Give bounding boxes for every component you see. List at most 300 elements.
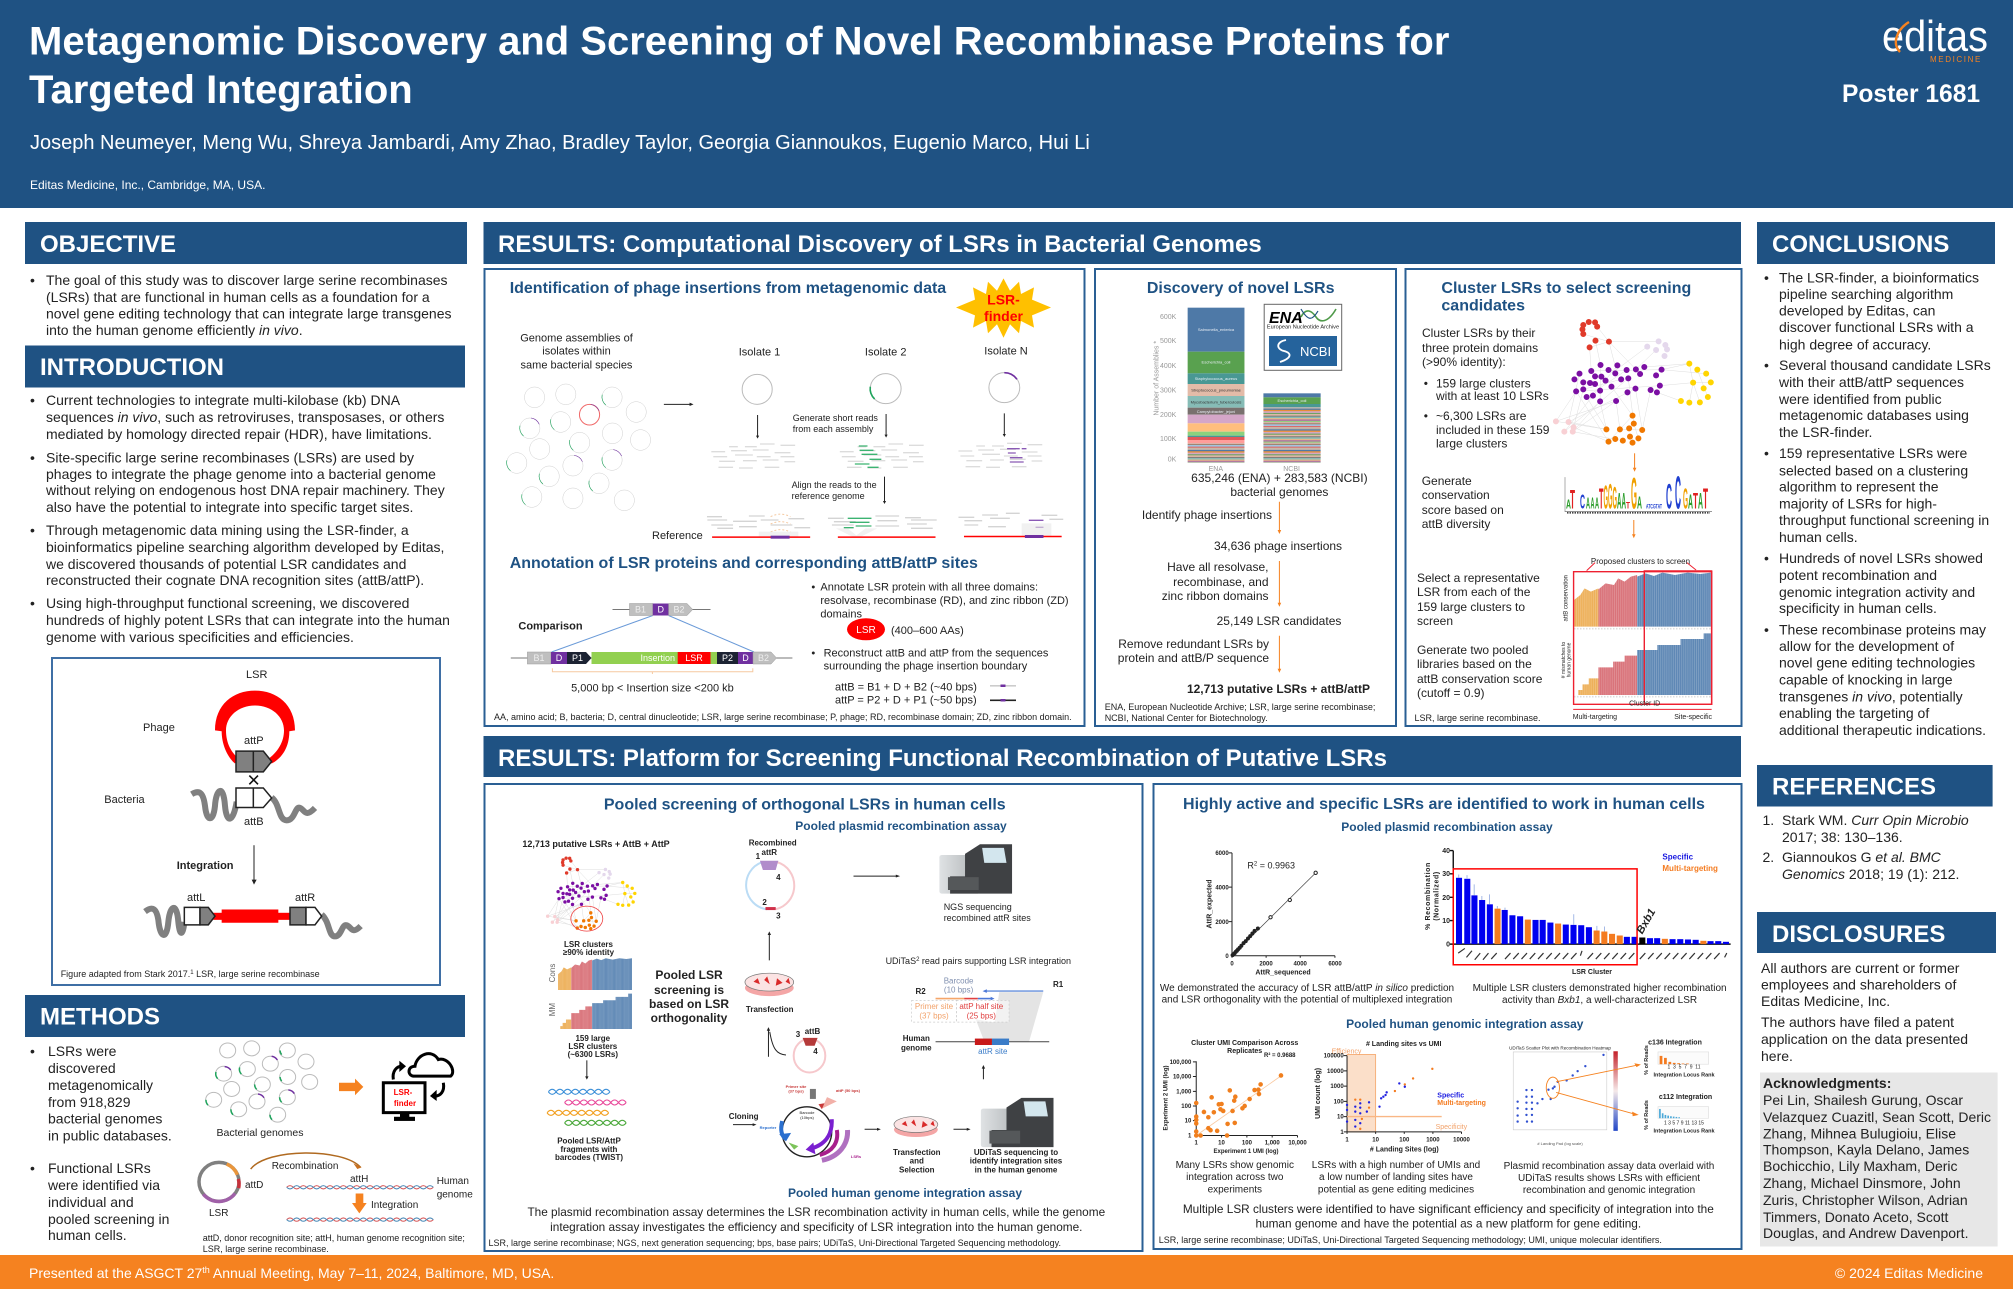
chart: landing sites vs UMI: UMI count (log) bbox=[1315, 1068, 1322, 1119]
labels: read pair diagram: attR site bbox=[978, 1047, 1008, 1056]
labels: read pair diagram: genome bbox=[901, 1044, 932, 1052]
chart: attB sequence logo: G bbox=[1604, 478, 1608, 516]
conclusions bullets: throughput functional screening in bbox=[1779, 512, 1989, 528]
icon: recombined plasmid bbox=[746, 861, 794, 909]
arrows: library workflow bbox=[865, 1128, 971, 1131]
plasmid labels: 4 bbox=[776, 873, 781, 882]
chart: heatmap scatter with integration insets: 1 3 5 7 9 11 13 15 bbox=[1664, 1120, 1704, 1126]
introduction bullets: • bbox=[30, 392, 35, 408]
chart: landing sites vs UMI: 10000 bbox=[1327, 1069, 1344, 1075]
panel summary: integration assay investigates the efficiency and specificity of LSR integration into the human genome. bbox=[550, 1220, 1082, 1234]
short reads bbox=[707, 443, 1063, 528]
plasmid labels: Primer site bbox=[786, 1084, 807, 1089]
chart: UMI replicates scatter: 1,000 bbox=[1176, 1090, 1192, 1096]
chart: attB sequence logo: T bbox=[1599, 482, 1604, 515]
chart: stacked assemblies: 600K bbox=[1160, 314, 1177, 321]
chart: landing sites vs UMI bbox=[1315, 1041, 1486, 1153]
footnote: LSR, large serine recombinase; NGS, next generation sequencing; bps, base pairs; UDiTaS, Uni-Directional Targeted Sequencing methodology. bbox=[488, 1238, 1061, 1248]
plasmid labels bbox=[729, 838, 862, 1159]
panel: phage insertions and annotation bbox=[484, 269, 1084, 726]
arrows: filter flow bbox=[1278, 502, 1281, 673]
chart: heatmap scatter with integration insets bbox=[1509, 1040, 1715, 1146]
plasmid labels: Reporter bbox=[760, 1125, 777, 1130]
heading: cluster LSRs: Cluster LSRs to select screening bbox=[1441, 280, 1691, 297]
icon: editas logo: MEDICINE bbox=[1930, 55, 1982, 64]
subheading: genomic integration: Pooled human genomic integration assay bbox=[1346, 1017, 1584, 1031]
conclusions bullets: selected based on a clustering bbox=[1779, 462, 1968, 478]
annotation bullets: • bbox=[811, 647, 815, 659]
callout: LSR-finder star bbox=[956, 278, 1051, 338]
text: clustering: • bbox=[1424, 376, 1428, 390]
annotation bullets: resolvase, recombinase (RD), and zinc ribbon (ZD) bbox=[820, 595, 1069, 607]
plasmid labels: 2 bbox=[762, 898, 767, 907]
footnote: LSR, large serine recombinase; UDiTaS, Uni-Directional Targeted Sequencing methodology; UMI, unique molecular identifiers. bbox=[1159, 1235, 1662, 1245]
chart: stacked assemblies: NCBI bbox=[1283, 466, 1300, 473]
chart: proposed clusters: attB conservation bbox=[1564, 575, 1570, 621]
disclosures text: Editas Medicine, Inc. bbox=[1761, 993, 1890, 1009]
diagram: isolates and read alignment bbox=[507, 373, 1063, 539]
chart: attB sequence logo: A bbox=[1590, 496, 1595, 513]
caption: replicates: Many LSRs show genomic bbox=[1176, 1160, 1294, 1171]
objective text: novel gene editing technology that can integrate large transgenes bbox=[46, 306, 452, 322]
flow: filter steps: zinc ribbon domains bbox=[1162, 589, 1268, 603]
reference lines bbox=[712, 535, 1062, 539]
label: read alignment: reference genome bbox=[792, 491, 865, 501]
chart: stacked assemblies: Salmonella_enterica bbox=[1198, 327, 1235, 332]
acknowledgments box: Thompson, Kayla Delano, James bbox=[1763, 1142, 1969, 1158]
heading: references bbox=[1757, 765, 1993, 806]
icon: sequencer bbox=[939, 844, 1012, 894]
chart: landing sites vs UMI: 10 bbox=[1372, 1138, 1380, 1144]
heading: pooled screening: Pooled screening of orthogonal LSRs in human cells bbox=[604, 796, 1006, 814]
acknowledgments box: Pei Lin, Shailesh Gurung, Oscar bbox=[1763, 1092, 1963, 1108]
panel summary: The plasmid recombination assay determines the LSR recombination activity in human cells, while the genome bbox=[527, 1205, 1106, 1219]
flow: filter steps: 25,149 LSR candidates bbox=[1217, 614, 1341, 628]
chart: LSR cluster network bbox=[1556, 322, 1711, 443]
panel: active and specific LSRs bbox=[1154, 784, 1742, 1249]
label: fragments: Pooled LSR/AttP bbox=[557, 1137, 621, 1146]
chart: attB sequence logo: A bbox=[1688, 491, 1693, 514]
diagram: insertion comparison: Insertion bbox=[640, 653, 675, 663]
footer bar bbox=[0, 1255, 2013, 1289]
chart: attB sequence logo: G bbox=[1683, 482, 1688, 515]
conclusions bullets: in vivo, potentially bbox=[1852, 689, 1963, 705]
introduction bullets: • bbox=[30, 522, 35, 538]
diagram labels: LSR bbox=[246, 669, 267, 681]
conclusions bullets: genomic integration activity and bbox=[1779, 584, 1975, 600]
methods bullets: Functional LSRs bbox=[48, 1160, 151, 1176]
chart: landing sites vs UMI: # Landing Sites (log) bbox=[1370, 1146, 1439, 1153]
chart: landing sites vs UMI: 1000 bbox=[1426, 1138, 1440, 1144]
chart: attB sequence logo: T bbox=[1626, 500, 1631, 510]
label: read generation: Generate short reads bbox=[793, 413, 878, 423]
chart: attR scatter bbox=[1206, 851, 1342, 976]
chart: stacked assemblies: Streptococcus_pneumoniae bbox=[1191, 388, 1242, 392]
annotation bullets: Reconstruct attB and attP from the sequences bbox=[824, 647, 1049, 659]
plasmid labels: attR bbox=[762, 848, 777, 857]
chart: proposed clusters: Cluster ID bbox=[1629, 700, 1660, 708]
chart: recombination bars: 10 bbox=[1442, 918, 1450, 925]
chart: stacked assemblies bbox=[1154, 308, 1321, 473]
callout: pooled LSR orthogonality: screening is bbox=[654, 983, 724, 997]
chart: landing sites vs UMI: 100 bbox=[1399, 1138, 1410, 1144]
label: genome assemblies: same bacterial species bbox=[521, 360, 633, 372]
label: genome assemblies: Genome assemblies of bbox=[520, 332, 634, 344]
text: clustering: Cluster LSRs by their bbox=[1422, 326, 1535, 340]
chart: attB sequence logo: G bbox=[1612, 481, 1617, 516]
text: select representative: screen bbox=[1417, 614, 1453, 628]
annotation bullets: surrounding the phage insertion boundary bbox=[824, 660, 1028, 672]
chart: UMI replicates scatter: 100 bbox=[1242, 1141, 1253, 1147]
arrow: UDiTaS up bbox=[982, 1065, 985, 1079]
chart: mini cluster bars bbox=[548, 958, 632, 1029]
introduction bullets bbox=[30, 392, 450, 645]
chart: recombination bars: Multi-targeting bbox=[1662, 864, 1718, 873]
label: UDiTaS read pairs: read pairs supporting LSR integration bbox=[919, 956, 1071, 966]
objective text: The goal of this study was to discover large serine recombinases bbox=[46, 272, 448, 288]
acknowledgments box: Zhang, Mihnea Bulugioiu, Elise bbox=[1763, 1126, 1956, 1142]
chart: landing sites vs UMI: 100000 bbox=[1324, 1054, 1344, 1060]
isolate labels: Isolate 2 bbox=[865, 346, 906, 358]
flow: filter steps: Remove redundant LSRs by bbox=[1118, 637, 1269, 651]
label: comparison: Comparison bbox=[518, 620, 583, 632]
diagram labels: attH bbox=[350, 1174, 368, 1185]
diagram labels: attL bbox=[187, 892, 205, 904]
label: LSR clusters: LSR clusters bbox=[564, 940, 614, 949]
acknowledgments box: Zuris, Christopher Wilson, Adrian bbox=[1763, 1192, 1968, 1208]
label: UDiTaS sequencing: identify integration sites bbox=[970, 1157, 1063, 1166]
footer: meeting: Annual Meeting, May 7–11, 2024, Baltimore, MD, USA. bbox=[210, 1265, 554, 1281]
chart: attB sequence logo: A bbox=[1698, 489, 1703, 514]
conclusions bullets: the LSR-finder. bbox=[1779, 424, 1872, 440]
chart: attB sequence logo: A bbox=[1566, 497, 1571, 511]
figure note: 1 bbox=[190, 970, 194, 976]
label: large clusters: (~6300 LSRs) bbox=[568, 1050, 618, 1059]
heading: conclusions bbox=[1757, 222, 1995, 264]
text: clustering: included in these 159 bbox=[1436, 423, 1550, 437]
chart: heatmap scatter with integration insets: # Landing Pad (log scale) bbox=[1537, 1141, 1583, 1146]
footnote: AA, amino acid; B, bacteria; D, central dinucleotide; LSR, large serine recombinase; P, phage; RD, recombinase domain; ZD, zinc ribbon domain. bbox=[494, 712, 1072, 722]
conclusions bullets: These recombinase proteins may bbox=[1779, 622, 1986, 638]
diagram labels: Integration bbox=[371, 1200, 418, 1211]
diagram labels: attB bbox=[244, 816, 264, 828]
introduction bullets: also have the potential to integrate into specific target sites. bbox=[46, 499, 413, 515]
arrow: cloning bbox=[733, 1123, 756, 1126]
conclusions bullets: metagenomic databases using bbox=[1779, 407, 1969, 423]
caption: landing sites: LSRs with a high number of UMIs and bbox=[1312, 1160, 1480, 1171]
chart: recombination bars: 30 bbox=[1442, 871, 1450, 878]
chart: recombination bars bbox=[1425, 848, 1731, 976]
conclusions bullets: discover functional LSRs with a bbox=[1779, 319, 1974, 335]
text: pooled libraries: (cutoff = 0.9) bbox=[1417, 686, 1484, 700]
chart: attR scatter: 0 bbox=[1230, 962, 1234, 968]
integration label: Integration bbox=[177, 860, 234, 872]
label: read alignment: Align the reads to the bbox=[792, 480, 877, 490]
chart: proposed clusters bbox=[1561, 557, 1712, 721]
chart: UMI replicates scatter: 1 bbox=[1195, 1141, 1199, 1147]
chart: landing sites vs UMI: Efficiency bbox=[1332, 1048, 1362, 1056]
methods bullets bbox=[30, 1043, 172, 1243]
introduction bullets: reconstructed their cognate DNA recognition sites (attB/attP). bbox=[46, 572, 424, 588]
poster title: Metagenomic Discovery and Screening of Novel Recombinase Proteins for bbox=[29, 20, 1449, 64]
diagram: insertion comparison: B1 bbox=[635, 605, 646, 615]
icon: ENA and NCBI logos: ENA bbox=[1269, 310, 1303, 327]
chart: stacked assemblies: Staphylococcus_aureus bbox=[1195, 376, 1237, 381]
chart: heatmap scatter with integration insets: 1 3 5 7 9 11 bbox=[1668, 1064, 1701, 1070]
references list: et al. BMC bbox=[1875, 849, 1942, 865]
chart: recombination bars: 20 bbox=[1442, 895, 1450, 902]
diagram: insertion comparison bbox=[511, 604, 792, 674]
objective text: in vivo. bbox=[259, 322, 303, 338]
introduction bullets: phages to integrate the phage genome into a bacterial genome bbox=[46, 466, 436, 482]
references list: 2. bbox=[1762, 849, 1774, 865]
diagram labels: attP bbox=[244, 735, 264, 747]
references list: Genomics bbox=[1782, 866, 1845, 882]
panel: discovery of novel LSRs bbox=[1095, 269, 1396, 726]
text: select representative: 159 large clusters to bbox=[1417, 600, 1525, 614]
text: pooled libraries: libraries based on the bbox=[1417, 657, 1532, 671]
label: bacterial genomes: Bacterial genomes bbox=[217, 1127, 303, 1139]
chart: attB sequence logo: T bbox=[1703, 482, 1708, 515]
chart: landing sites vs UMI: Specific bbox=[1437, 1092, 1464, 1100]
chart: attR scatter: = 0.9963 bbox=[1257, 860, 1295, 870]
arrow: orange bbox=[339, 1079, 363, 1095]
computer label: finder bbox=[394, 1099, 416, 1108]
objective text: into the human genome efficiently bbox=[46, 322, 259, 338]
heading: annotation of LSR proteins: Annotation of LSR proteins and corresponding attB/attP sites bbox=[510, 555, 978, 572]
plasmid labels: LSRs bbox=[851, 1154, 862, 1159]
heading: results computational discovery bbox=[484, 222, 1741, 264]
icon: sequencer UDiTaS bbox=[981, 1098, 1054, 1147]
chart: attB sequence logo: G bbox=[1631, 468, 1637, 518]
text: clustering bbox=[1422, 326, 1550, 450]
heading: results platform: RESULTS: Platform for Screening Functional Recombination of Putative LSRs bbox=[498, 745, 1387, 772]
label: large clusters: LSR clusters bbox=[568, 1042, 618, 1051]
caption: replicates: experiments bbox=[1208, 1184, 1262, 1195]
plasmid labels: (10bps) bbox=[800, 1115, 814, 1120]
conclusions bullets: • bbox=[1764, 550, 1769, 566]
chart: attB sequence logo: A bbox=[1617, 489, 1621, 514]
authors: Joseph Neumeyer, Meng Wu, Shreya Jambardi, Amy Zhao, Bradley Taylor, Georgia Giannoukos, Eugenio Marco, Hui Li bbox=[30, 132, 1090, 154]
label: insertion size: 5,000 bp < Insertion size <200 kb bbox=[571, 682, 734, 694]
chart: UMI replicates scatter: 1,000 bbox=[1265, 1141, 1280, 1147]
labels: read pair diagram: (25 bps) bbox=[967, 1012, 996, 1021]
icon: genome circles bbox=[507, 384, 651, 511]
arrow: assemblies to isolates bbox=[664, 403, 694, 406]
labels: read pair diagram: R2 bbox=[916, 987, 926, 996]
acknowledgments box: Timmers, Donato Aceto, Scott bbox=[1763, 1209, 1949, 1225]
plasmid labels: (37 bps) bbox=[788, 1088, 804, 1094]
diagram labels: Bacteria bbox=[104, 794, 146, 806]
icon: ENA and NCBI logos: European Nucleotide Archive bbox=[1267, 324, 1339, 330]
chart: recombination bars: 0 bbox=[1446, 942, 1450, 948]
chart: stacked assemblies: 100K bbox=[1160, 436, 1177, 443]
heading: introduction: INTRODUCTION bbox=[40, 354, 224, 381]
heading: references: REFERENCES bbox=[1772, 774, 1936, 800]
introduction bullets: Site-specific large serine recombinases (LSRs) are used by bbox=[46, 450, 414, 466]
plasmid labels: attP (50 bps) bbox=[836, 1088, 861, 1093]
section: objective bbox=[25, 222, 467, 338]
chart: attB sequence logo: ATCGTAT bbox=[1646, 503, 1662, 510]
chart: stacked assemblies: Campylobacter_jejuni bbox=[1197, 409, 1235, 414]
shaded read piles bbox=[759, 523, 1051, 537]
diagram: insertion comparison: B2 bbox=[758, 653, 769, 663]
chart: recombination bars: Specific bbox=[1662, 852, 1694, 862]
callout: LSR-finder star: LSR- bbox=[987, 291, 1020, 307]
introduction bullets: without relying on endogenous host DNA repair machinery. They bbox=[45, 482, 445, 498]
chart: heatmap scatter with integration insets: Integration Locus Rank bbox=[1653, 1128, 1715, 1134]
icon: attB plasmid with curve arrow bbox=[767, 1027, 825, 1072]
icon: att site bars bbox=[990, 684, 1016, 702]
chart: attR scatter: AttR_expected bbox=[1206, 879, 1214, 929]
methods bullets: bacterial genomes bbox=[48, 1110, 162, 1126]
icon: petri dish bbox=[745, 973, 794, 996]
chart: recombination bars: LSR Cluster bbox=[1572, 969, 1612, 976]
plasmid labels: 3 bbox=[776, 912, 781, 921]
chart: proposed clusters: Multi-targeting bbox=[1573, 714, 1617, 721]
chart: attB sequence logo: C bbox=[1580, 491, 1585, 514]
methods bullets: metagenomically bbox=[48, 1077, 153, 1093]
references list: Curr Opin Microbio bbox=[1851, 812, 1969, 828]
methods bullets: in public databases. bbox=[48, 1128, 172, 1144]
annotation bullets: attB = B1 + D + B2 (~40 bps) bbox=[835, 681, 977, 693]
labels: read pair diagram: (37 bps) bbox=[919, 1012, 949, 1021]
disclosures text: employees and shareholders of bbox=[1761, 977, 1956, 993]
labels: read pair diagram: (10 bps) bbox=[944, 986, 974, 995]
introduction bullets: hundreds of highly potent LSRs that can integrate into the human bbox=[46, 612, 450, 628]
chart: recombination bars: Bxb1 bbox=[1634, 907, 1658, 936]
heading: introduction bbox=[25, 346, 465, 388]
labels: read pair diagram bbox=[901, 976, 1064, 1056]
text: conservation: score based on bbox=[1422, 503, 1504, 517]
arrow: recombined to sequencing bbox=[854, 875, 900, 877]
section: conclusions bbox=[1757, 222, 1995, 738]
conclusions bullets: high degree of accuracy. bbox=[1779, 336, 1931, 352]
label: NGS sequencing: recombined attR sites bbox=[944, 913, 1031, 923]
chart: attB sequence logo: T bbox=[1693, 489, 1698, 514]
chart: recombination bars: % Recombination bbox=[1425, 862, 1432, 930]
section: platform results bbox=[484, 736, 1742, 1251]
callout: pooled LSR orthogonality: Pooled LSR bbox=[655, 968, 723, 982]
introduction bullets: bioinformatics pipeline searching algorithm developed by Editas, bbox=[46, 539, 444, 555]
introduction bullets: • bbox=[30, 450, 35, 466]
diagram labels: genome bbox=[437, 1190, 473, 1200]
figure note: LSR, large serine recombinase bbox=[194, 969, 320, 979]
panel: pooled screening bbox=[484, 784, 1142, 1251]
heading: disclosures: DISCLOSURES bbox=[1772, 921, 1945, 948]
methods bullets: pooled screening in bbox=[48, 1211, 169, 1227]
heading: cluster LSRs: candidates bbox=[1441, 298, 1525, 314]
heading: disclosures bbox=[1757, 912, 1996, 953]
introduction bullets: Through metagenomic data mining using the LSR-finder, a bbox=[46, 522, 409, 538]
chart: attB sequence logo: T bbox=[1570, 485, 1575, 515]
annotation bullets bbox=[811, 581, 1069, 706]
objective text: • bbox=[30, 272, 35, 288]
header banner bbox=[0, 0, 2013, 208]
section: introduction bbox=[25, 346, 465, 985]
methods bullets: • bbox=[30, 1160, 35, 1176]
diagram: insertion comparison: D bbox=[556, 653, 563, 663]
affiliation: Editas Medicine, Inc., Cambridge, MA, USA. bbox=[30, 178, 265, 192]
icon: library plasmid bbox=[779, 1089, 848, 1160]
caption: overlay: UDiTaS results shows LSRs with efficient bbox=[1518, 1173, 1700, 1184]
text: pooled libraries: Generate two pooled bbox=[1417, 643, 1528, 657]
chart: attR scatter: 6000 bbox=[1328, 962, 1342, 968]
diagram: insertion comparison: P2 bbox=[722, 653, 733, 663]
label: fragments: fragments with bbox=[561, 1145, 618, 1154]
label: large clusters: 159 large bbox=[575, 1034, 611, 1043]
arrow: transfection up bbox=[768, 931, 771, 960]
chart: attB sequence logo: A bbox=[1622, 489, 1626, 514]
annotation bullets: domains bbox=[820, 608, 862, 620]
arrow: network to logo bbox=[1633, 453, 1636, 472]
plasmid labels: Barcode bbox=[800, 1110, 815, 1115]
chart: attB sequence logo: A bbox=[1586, 496, 1590, 513]
text: select representative: LSR from each of the bbox=[1417, 585, 1531, 599]
acknowledgments box: Bochicchio, Lily Maxham, Deric bbox=[1763, 1158, 1958, 1174]
poster title: Targeted Integration bbox=[29, 68, 413, 112]
diagram: insertion comparison: B2 bbox=[673, 605, 685, 615]
plasmid labels: 3 bbox=[796, 1030, 801, 1039]
introduction bullets: sequences bbox=[46, 409, 118, 425]
introduction bullets: we discovered thousands of potential LSR candidates and bbox=[45, 556, 406, 572]
diagrams: screening workflow bbox=[547, 844, 1054, 1160]
heading: objective bbox=[25, 222, 467, 264]
acknowledgments box: Acknowledgments: bbox=[1763, 1075, 1891, 1091]
text: conservation: Generate bbox=[1422, 474, 1472, 488]
plasmid labels: Cloning bbox=[729, 1112, 759, 1121]
conclusions bullets: • bbox=[1764, 445, 1769, 461]
conclusions bullets: pipeline searching algorithm bbox=[1779, 286, 1953, 302]
caption: landing sites: potential as gene editing medicines bbox=[1318, 1184, 1474, 1195]
conclusions bullets: Several thousand candidate LSRs bbox=[1779, 357, 1991, 373]
poster number: Poster 1681 bbox=[1842, 81, 1980, 108]
conclusions bullets: The LSR-finder, a bioinformatics bbox=[1779, 270, 1979, 286]
chart: UMI replicates scatter: 10 bbox=[1218, 1141, 1225, 1147]
flow: filter steps: Identify phage insertions bbox=[1142, 508, 1272, 522]
chart: stacked assemblies: Mycobacterium_tuberculosis bbox=[1191, 400, 1241, 404]
heading: objective: OBJECTIVE bbox=[40, 231, 176, 258]
footnote: ENA, European Nucleotide Archive; LSR, large serine recombinase; bbox=[1105, 702, 1375, 712]
conclusions bullets: • bbox=[1764, 622, 1769, 638]
caption: bars: Bxb1, a well-characterized LSR bbox=[1558, 995, 1697, 1006]
disclosures text: The authors have filed a patent bbox=[1761, 1014, 1954, 1030]
chart: stacked assemblies: Escherichia_coli bbox=[1202, 360, 1231, 364]
labels: read pair diagram: Primer site bbox=[915, 1002, 954, 1011]
chart: UMI replicates scatter: Experiment 1 UMI (log) bbox=[1213, 1149, 1279, 1155]
label: UDiTaS sequencing: in the human genome bbox=[975, 1166, 1058, 1175]
introduction bullets: genome with various specificities and efficiencies. bbox=[46, 629, 354, 645]
flow: filter steps: recombinase, and bbox=[1173, 575, 1268, 589]
methods bullets: • bbox=[30, 1043, 35, 1059]
references list: Stark WM. bbox=[1782, 812, 1851, 828]
labels: read pair diagram: Human bbox=[903, 1034, 930, 1043]
heading: identification of phage insertions: Identification of phage insertions from metagenomic data bbox=[510, 280, 946, 297]
label: LSR clusters: ≥90% identity bbox=[563, 948, 615, 957]
chart: attR scatter: 4000 bbox=[1294, 962, 1308, 968]
chart: attB sequence logo: G bbox=[1608, 477, 1612, 517]
conclusions bullets: Hundreds of novel LSRs showed bbox=[1779, 550, 1983, 566]
text: conservation: conservation bbox=[1422, 488, 1490, 502]
chart: attB sequence logo bbox=[1565, 467, 1712, 519]
section: computational discovery results bbox=[484, 222, 1742, 726]
flow: filter steps: 12,713 putative LSRs + attB/attP bbox=[1187, 682, 1370, 696]
annotation bullets: • bbox=[811, 581, 815, 593]
chart: landing sites vs UMI: Specificity bbox=[1436, 1124, 1468, 1131]
diagram labels: Recombination bbox=[272, 1161, 338, 1172]
chart: UMI replicates scatter: 10,000 bbox=[1173, 1075, 1192, 1081]
chart: landing sites vs UMI: 1000 bbox=[1330, 1084, 1344, 1090]
